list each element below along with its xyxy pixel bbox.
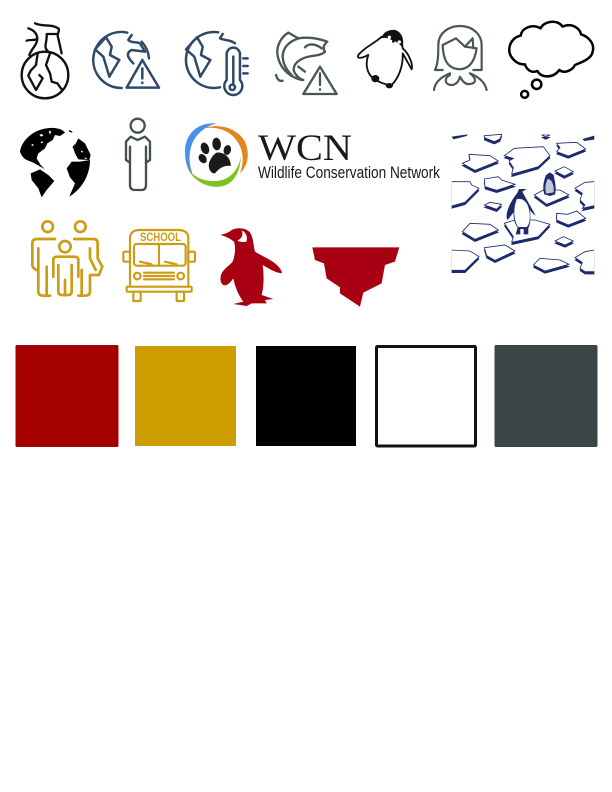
swatch: gold: [135, 346, 236, 446]
small penguin: [543, 172, 556, 196]
large penguin: [507, 189, 536, 234]
swatch: white outlined: [376, 346, 476, 446]
illustration: penguins on ice floes: [452, 134, 594, 274]
icon: fish with warning triangle: [276, 33, 337, 94]
swatch: black: [256, 346, 356, 446]
icon: standing person: [126, 119, 150, 190]
swatch: red: [16, 345, 118, 447]
icon: red penguin: [220, 228, 282, 306]
icon: globe with thermometer: [186, 32, 248, 95]
icon: thought bubble: [509, 22, 593, 98]
icon: gold family: [32, 221, 102, 296]
logo wordmark: WCN: [258, 128, 352, 169]
logo: Wildlife Conservation Network: [185, 123, 441, 187]
logo mark: paw in coloured rings: [185, 123, 248, 187]
swatch: slate grey: [494, 345, 598, 447]
icon: burning earth: [22, 23, 68, 98]
icon: globe with warning triangle: [93, 32, 159, 88]
icon: penguin chick: [358, 30, 412, 88]
bus sign text: SCHOOL: [140, 232, 181, 244]
colour swatches: [16, 345, 598, 447]
logo tagline: Wildlife Conservation Network: [258, 164, 441, 182]
icon: red iceberg: [312, 247, 399, 307]
icon: gold school bus: [123, 230, 195, 301]
icon: woman portrait: [434, 26, 487, 90]
icon: black world globe: [20, 128, 91, 197]
